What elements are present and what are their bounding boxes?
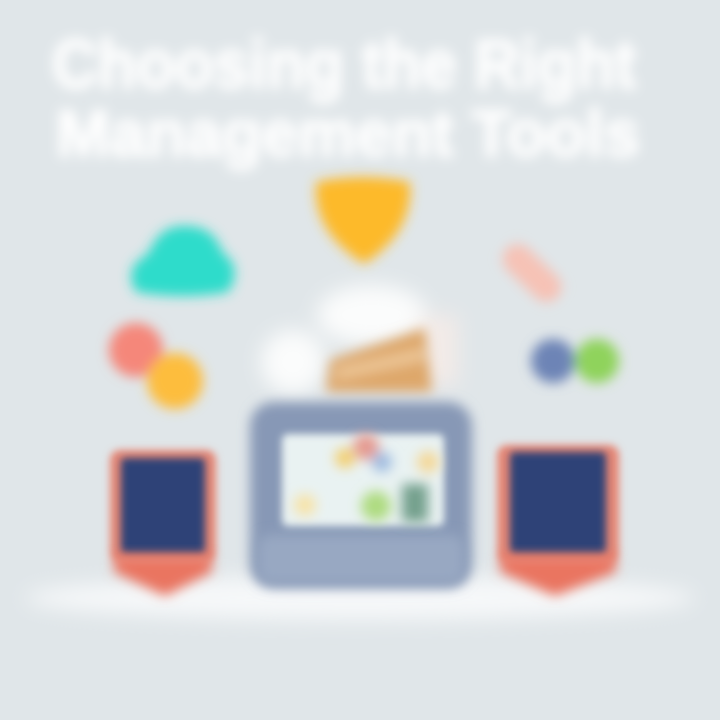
right device screen <box>510 452 606 554</box>
title <box>52 25 640 170</box>
left device <box>110 450 216 596</box>
title: Management Tools <box>56 96 640 170</box>
monitor base strip <box>258 535 464 583</box>
left device body <box>110 450 216 562</box>
left device base <box>114 556 212 596</box>
icon: blue and green capsule <box>531 339 619 383</box>
right device <box>497 445 619 596</box>
icon: yellow shield <box>316 177 410 264</box>
monitor frame <box>250 402 472 588</box>
ground shadow <box>25 576 695 620</box>
icon: pink pill <box>496 238 568 308</box>
right device base <box>500 556 616 596</box>
title: Choosing the Right <box>52 25 636 103</box>
right device body <box>497 445 619 563</box>
icon: cake slice <box>326 328 432 392</box>
screen content <box>294 434 439 522</box>
left device screen <box>121 458 205 554</box>
icon: red and yellow capsule <box>109 323 203 409</box>
white blob beside the cake <box>261 285 458 394</box>
center monitor <box>250 402 472 588</box>
icon: teal cloud <box>131 226 235 296</box>
monitor screen <box>282 434 444 526</box>
